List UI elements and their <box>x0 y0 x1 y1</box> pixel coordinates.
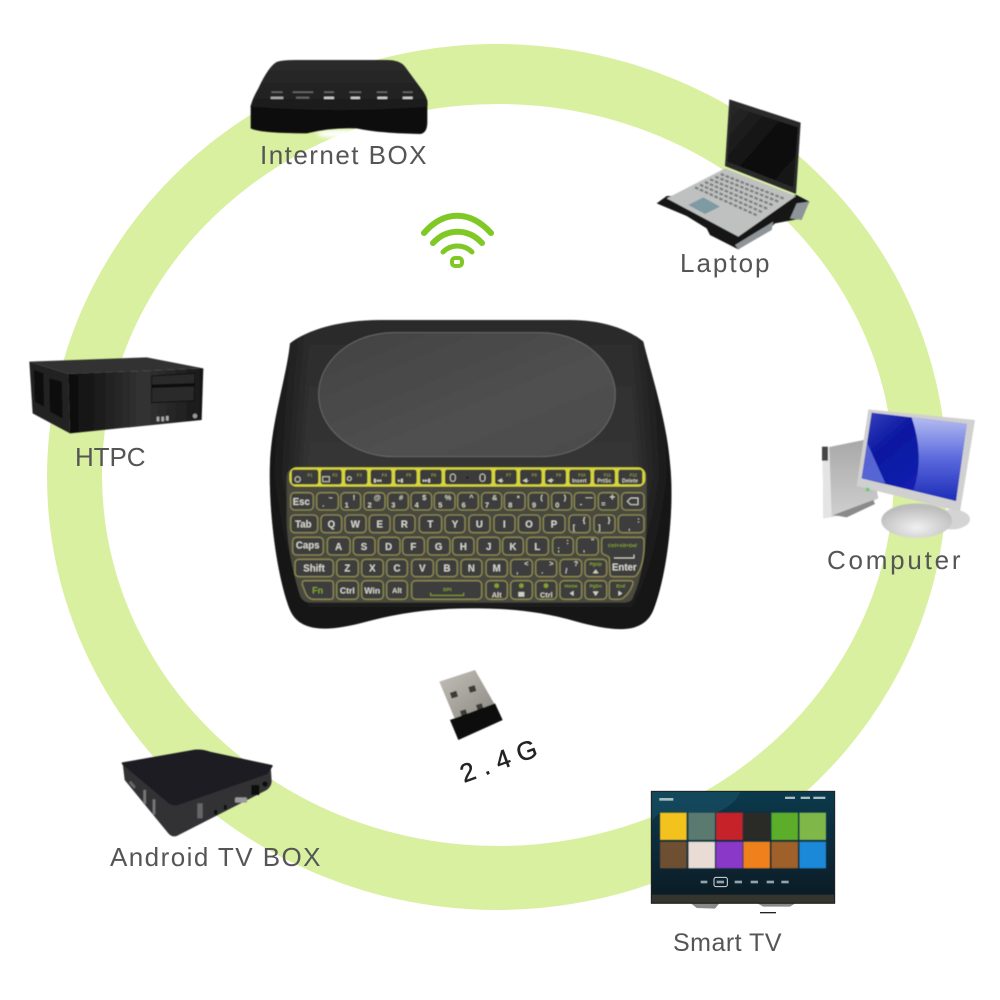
device: HTPC <box>29 357 203 433</box>
keyboard <box>270 320 671 629</box>
function key row: F11 <box>604 472 612 477</box>
shift row: Shift <box>303 563 326 574</box>
bottom row: PgDn <box>590 584 602 589</box>
light glow <box>317 130 363 138</box>
key deck <box>287 467 647 603</box>
number row: 3 <box>391 500 395 509</box>
number row: 1 <box>345 500 349 509</box>
QWERTY row: Q <box>328 519 336 530</box>
icon: wifi signal <box>424 216 491 266</box>
bottom row: Alt <box>492 590 502 599</box>
home row: D <box>385 542 392 553</box>
bottom row: Home <box>565 584 578 589</box>
label: Smart TV: Smart TV <box>673 929 783 957</box>
function key row: F5 <box>406 472 412 477</box>
QWERTY row: R <box>401 519 408 530</box>
QWERTY row: [ <box>573 523 576 532</box>
function key row: F8 <box>532 472 537 477</box>
case top <box>29 357 203 374</box>
bottom row: Alt <box>392 586 402 595</box>
home row: L <box>534 542 540 553</box>
bottom row: Win <box>364 585 380 595</box>
laptop screen <box>725 99 801 194</box>
TV frame <box>651 791 835 903</box>
home row: A <box>335 542 342 553</box>
home row: J <box>486 542 491 553</box>
number row: = <box>601 500 605 509</box>
number row: 8 <box>508 500 512 509</box>
QWERTY row: } <box>608 515 611 524</box>
device: Internet box <box>251 60 428 138</box>
case front <box>68 368 203 433</box>
home row: G <box>435 542 442 553</box>
laptop base <box>667 168 796 237</box>
function key row: PrtSc <box>597 478 611 484</box>
QWERTY row: ] <box>598 523 601 532</box>
number row: . <box>322 500 324 509</box>
shift row: X <box>369 563 376 574</box>
number row: ~ <box>329 494 333 503</box>
device: Android TV box <box>123 751 272 836</box>
number row: % <box>445 493 452 502</box>
enter key: Enter <box>612 562 637 573</box>
cooling stand <box>657 195 809 249</box>
number row: 4 <box>415 500 420 509</box>
ports <box>129 781 268 818</box>
QWERTY row: W <box>351 519 361 530</box>
box sides <box>123 763 272 836</box>
QWERTY row: Tab <box>295 519 312 530</box>
number row: & <box>492 493 498 502</box>
function key row: F4 <box>382 472 387 477</box>
number row: 6 <box>462 500 466 509</box>
shift row: / <box>565 566 567 575</box>
number row: - <box>580 500 583 509</box>
function key row: F6 <box>431 472 437 477</box>
label: Internet BOX: Internet BOX <box>260 140 428 170</box>
shift row: Z <box>344 563 350 574</box>
number row: ) <box>564 493 567 502</box>
number row: $ <box>422 493 426 502</box>
home row: ; <box>557 545 560 554</box>
function key row: ▮◂◂ <box>373 478 382 484</box>
USB dongle <box>439 670 503 740</box>
bottom row: DPI <box>443 587 452 593</box>
number row: 2 <box>368 500 372 509</box>
keyboard body <box>270 320 671 629</box>
enter key: Ctrl+Alt+Del <box>608 543 637 549</box>
home row: Caps <box>296 541 319 552</box>
shift row: M <box>493 563 501 574</box>
number row: 9 <box>532 500 536 509</box>
function key row: Delete <box>622 478 638 484</box>
QWERTY row: E <box>376 519 383 530</box>
shift row: N <box>468 563 475 574</box>
number row: ! <box>353 493 355 502</box>
function key row: F1 <box>307 472 313 477</box>
function key row: F3 <box>357 472 362 477</box>
function key row: ▸▸▮ <box>422 478 431 484</box>
home row: : <box>566 537 569 546</box>
function key row: F7 <box>506 472 512 477</box>
monitor stand <box>933 509 970 529</box>
touchpad <box>319 333 615 457</box>
case side <box>29 362 70 433</box>
device: laptop <box>657 99 809 249</box>
number row: — <box>585 493 593 502</box>
app tiles <box>660 813 826 868</box>
home row: S <box>361 542 368 553</box>
label: 2.4G: 2.4G <box>456 733 541 789</box>
QWERTY row: I <box>503 519 506 530</box>
shift row: PgUp <box>590 561 602 566</box>
label: Computer: Computer <box>827 545 962 575</box>
function key row: ◀- <box>522 478 529 484</box>
QWERTY row: , <box>628 523 630 532</box>
shift row: C <box>394 563 401 574</box>
bottom row <box>302 581 633 599</box>
home row: F <box>410 542 416 553</box>
bottom row: Ctrl <box>340 585 355 595</box>
enter key <box>602 537 644 577</box>
number row: 0 <box>555 500 559 509</box>
function key row: F9 <box>556 472 562 477</box>
shift row: , <box>516 566 518 575</box>
home row: " <box>591 536 594 545</box>
QWERTY row: T <box>427 519 433 530</box>
number row: ( <box>540 493 543 502</box>
number row: # <box>399 493 403 502</box>
number row <box>291 493 644 510</box>
monitor screen <box>862 413 967 501</box>
label: HTPC: HTPC <box>75 442 147 472</box>
monitor frame <box>857 409 975 512</box>
number row: 7 <box>485 500 489 509</box>
shift row: > <box>549 559 553 568</box>
laptop keys <box>695 174 784 216</box>
home row: , <box>583 545 585 554</box>
USB receiver body <box>450 703 503 740</box>
number row: Esc <box>293 497 311 508</box>
shift row: < <box>524 559 528 568</box>
green connection ring <box>47 44 947 910</box>
shift row: B <box>444 563 451 574</box>
TV top bar <box>659 797 825 801</box>
shift row: V <box>419 563 426 574</box>
bottom row: Ctrl <box>540 590 553 599</box>
function key row: Insert <box>572 478 587 484</box>
device: computer <box>822 409 975 538</box>
shift row <box>295 559 607 577</box>
number row: + <box>610 493 616 504</box>
number row: @ <box>374 493 381 502</box>
QWERTY row: : <box>637 515 640 524</box>
QWERTY row: U <box>476 519 483 530</box>
shift row: ? <box>574 559 579 568</box>
QWERTY row: Y <box>452 519 459 530</box>
shift row: . <box>541 566 543 575</box>
QWERTY row: { <box>583 515 586 524</box>
function key row: F10 <box>578 472 586 477</box>
number row: 5 <box>438 500 442 509</box>
QWERTY row: P <box>551 519 558 530</box>
number row: * <box>517 494 520 503</box>
USB plug metal <box>439 670 495 719</box>
function key row: ◀• <box>547 478 554 484</box>
function key row: F12 <box>630 472 638 477</box>
computer tower <box>823 439 878 518</box>
box body <box>251 60 428 134</box>
function key row: ◀- <box>497 478 504 484</box>
number row: ^ <box>469 493 474 502</box>
TV feet <box>690 903 797 913</box>
function key row: F2 <box>332 472 338 477</box>
label: Laptop: Laptop <box>680 248 771 278</box>
function key row <box>289 467 645 487</box>
QWERTY row: O <box>525 519 533 530</box>
label: Android TV BOX: Android TV BOX <box>110 842 322 872</box>
bottom row: End <box>616 584 625 589</box>
QWERTY row <box>291 515 644 533</box>
bottom row: Fn <box>312 585 323 595</box>
home row: H <box>460 542 467 553</box>
TV menu <box>701 877 789 887</box>
device: smart TV <box>651 791 835 913</box>
home row: K <box>510 542 517 553</box>
box top <box>123 751 272 804</box>
home row <box>293 536 598 555</box>
function key row: ▸▮ <box>397 478 404 484</box>
